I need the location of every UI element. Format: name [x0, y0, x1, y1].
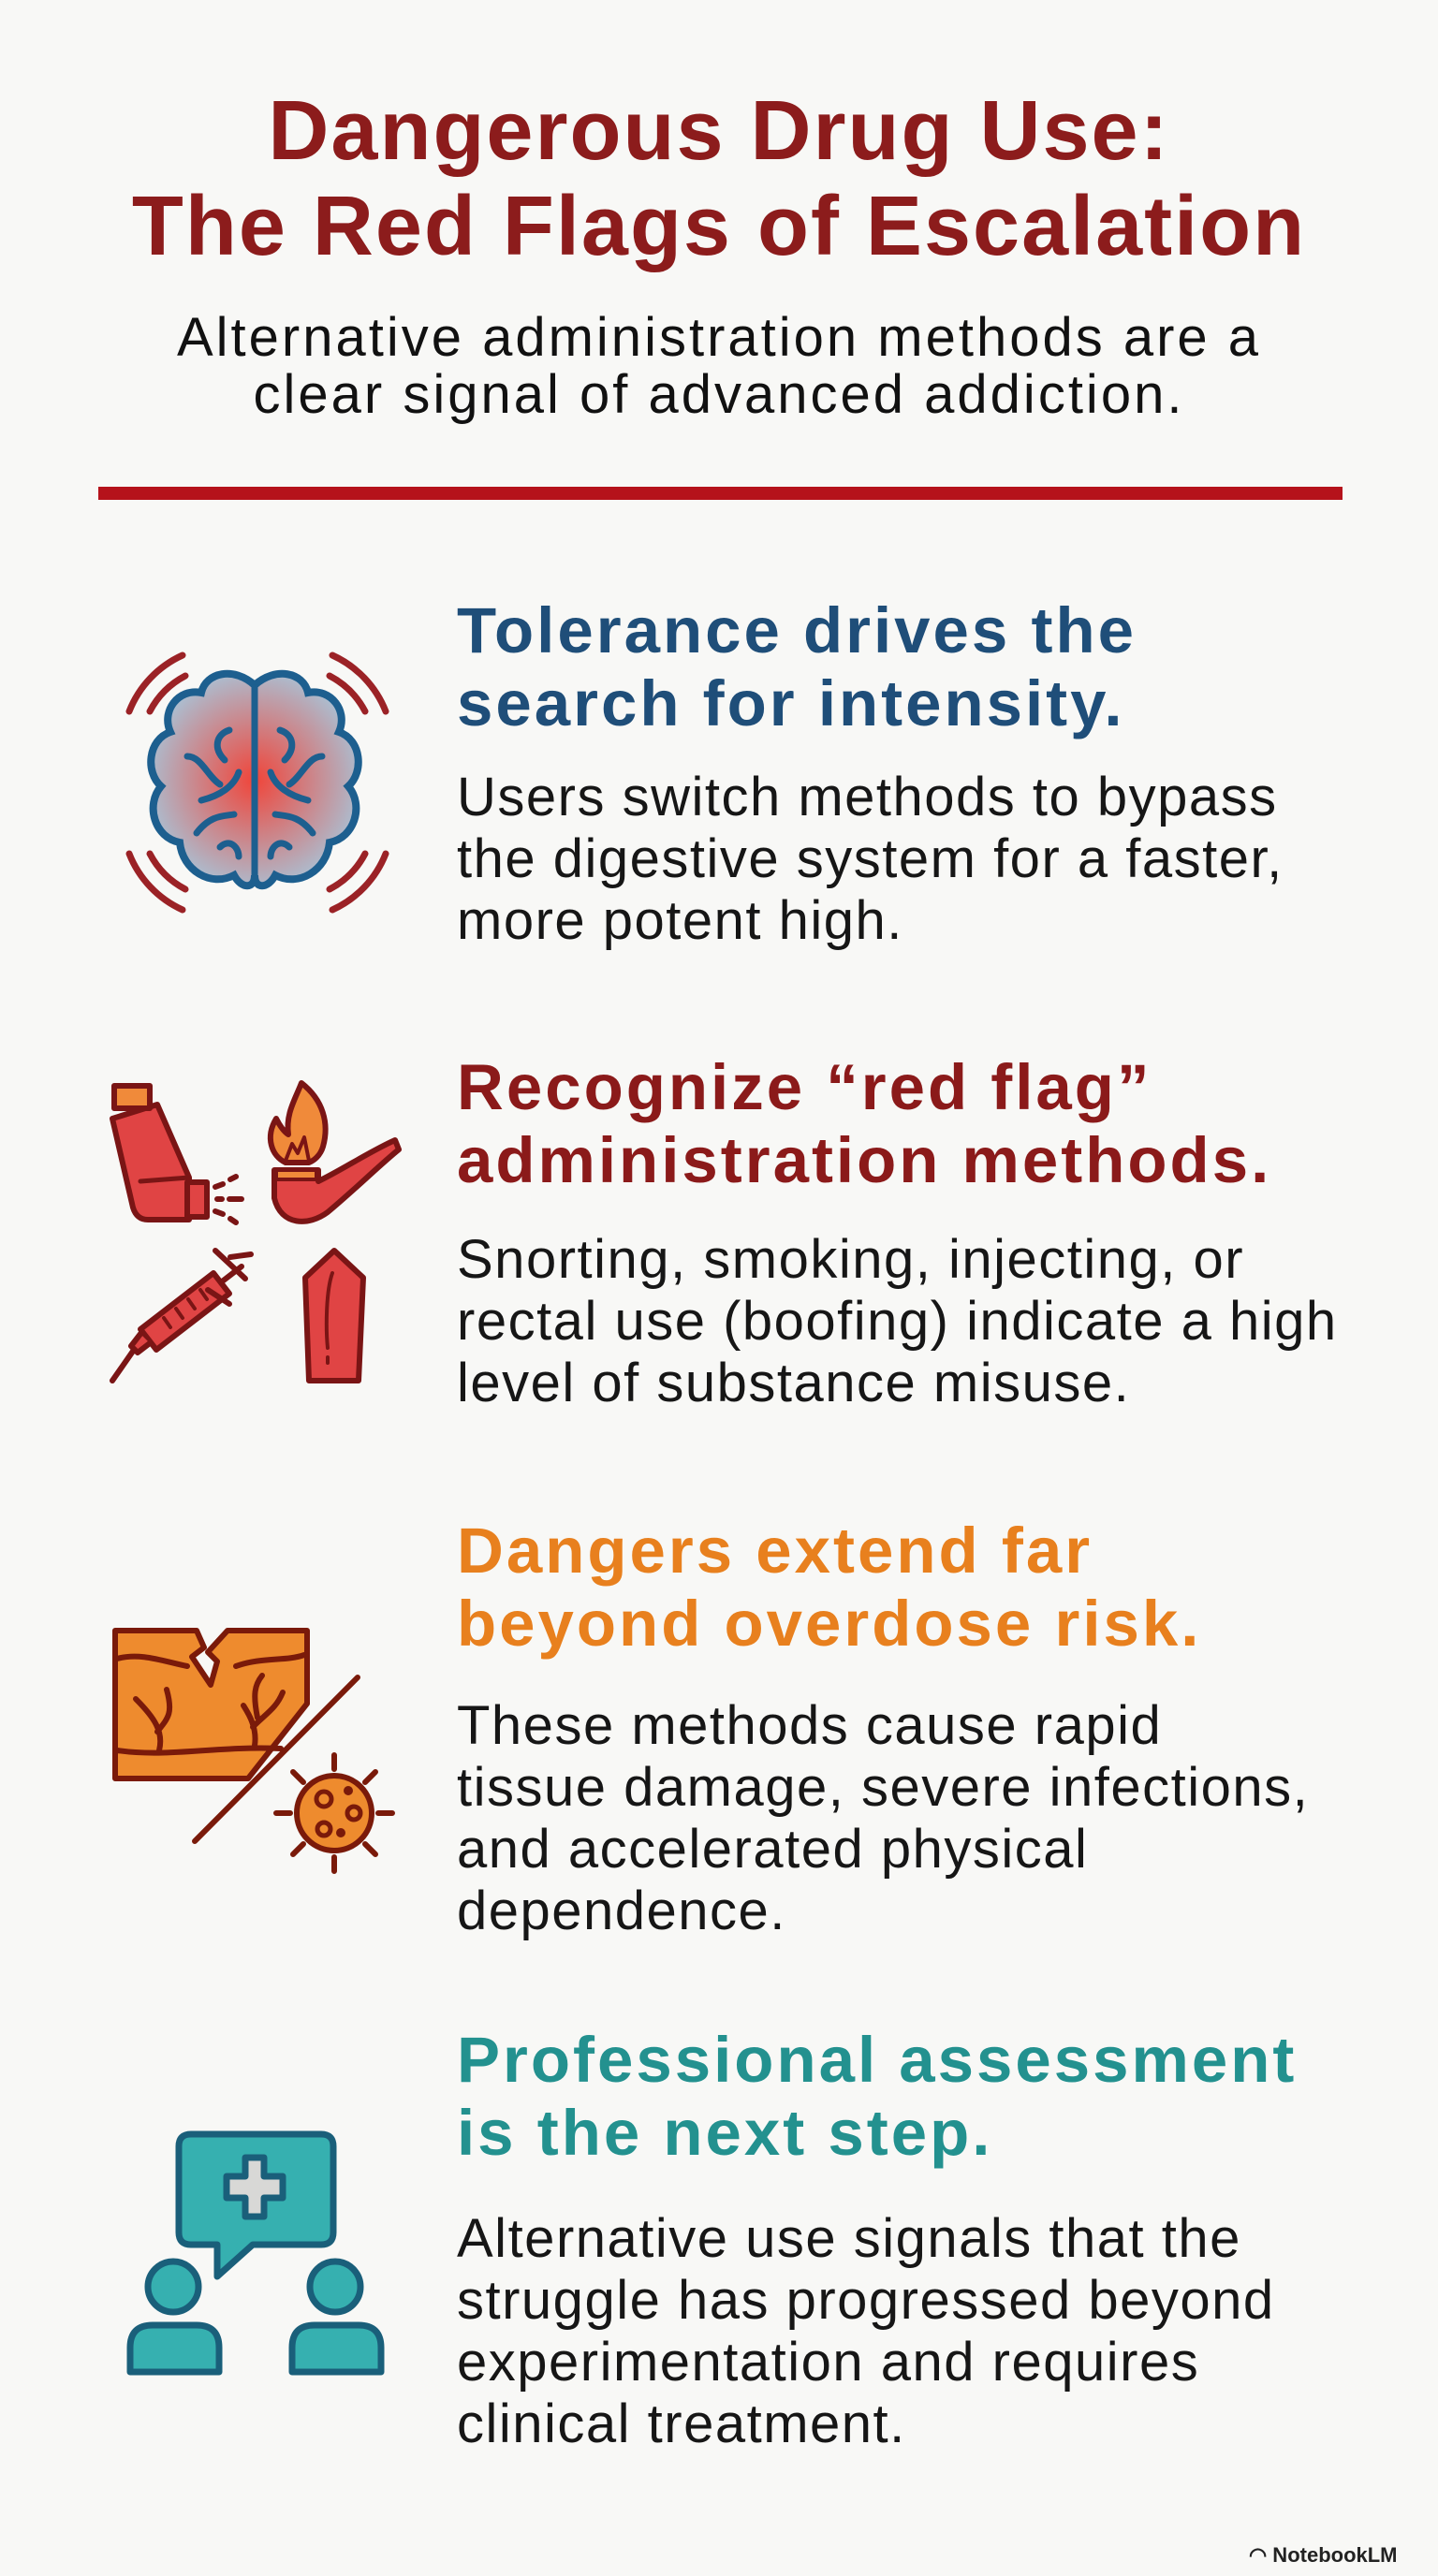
icon: tissue damage and infection	[112, 1628, 395, 1874]
title: The Red Flags of Escalation	[132, 180, 1306, 273]
heading 1: Tolerance drives the	[457, 594, 1137, 666]
heading 3	[457, 1515, 1201, 1660]
heading 2	[457, 1051, 1271, 1196]
body 2: rectal use (boofing) indicate a high	[457, 1291, 1338, 1352]
heading 2: Recognize “red flag”	[457, 1051, 1152, 1123]
body 4: Alternative use signals that the	[457, 2208, 1241, 2269]
heading 3: Dangers extend far	[457, 1515, 1093, 1587]
body 3: and accelerated physical	[457, 1819, 1088, 1880]
subtitle	[177, 307, 1261, 425]
subtitle: clear signal of advanced addiction.	[254, 364, 1184, 425]
body 4: struggle has progressed beyond	[457, 2270, 1275, 2331]
pipe	[274, 1140, 399, 1222]
icon: brain	[125, 651, 389, 914]
heading 1: search for intensity.	[457, 667, 1125, 739]
flame	[271, 1083, 326, 1163]
title	[132, 84, 1306, 273]
heading 2: administration methods.	[457, 1124, 1271, 1196]
body 1: Users switch methods to bypass	[457, 767, 1278, 827]
body 1: more potent high.	[457, 890, 903, 951]
footer: NotebookLM: ◠ NotebookLM	[1249, 2543, 1398, 2567]
body 3: These methods cause rapid	[457, 1695, 1162, 1756]
heading 1	[457, 594, 1137, 739]
suppository	[305, 1251, 363, 1381]
divider rule	[98, 487, 1343, 500]
heading 3: beyond overdose risk.	[457, 1588, 1201, 1660]
body 4	[457, 2208, 1275, 2454]
heading 4	[457, 2024, 1297, 2169]
body 3	[457, 1695, 1309, 1941]
body 4: clinical treatment.	[457, 2393, 906, 2454]
body 2: level of substance misuse.	[457, 1353, 1130, 1413]
title: Dangerous Drug Use:	[268, 84, 1170, 178]
syringe	[140, 1273, 229, 1350]
icon: professional consultation	[127, 2130, 384, 2376]
body 1	[457, 767, 1284, 951]
heading 4: Professional assessment	[457, 2024, 1297, 2096]
body 1: the digestive system for a faster,	[457, 828, 1284, 889]
body 3: tissue damage, severe infections,	[457, 1757, 1309, 1818]
heading 4: is the next step.	[457, 2097, 992, 2169]
subtitle: Alternative administration methods are a	[177, 307, 1261, 368]
body 3: dependence.	[457, 1881, 786, 1941]
body 2: Snorting, smoking, injecting, or	[457, 1229, 1244, 1290]
icon: administration methods	[110, 1080, 403, 1383]
inhaler	[112, 1105, 189, 1220]
body 4: experimentation and requires	[457, 2332, 1199, 2393]
body 2	[457, 1229, 1338, 1413]
